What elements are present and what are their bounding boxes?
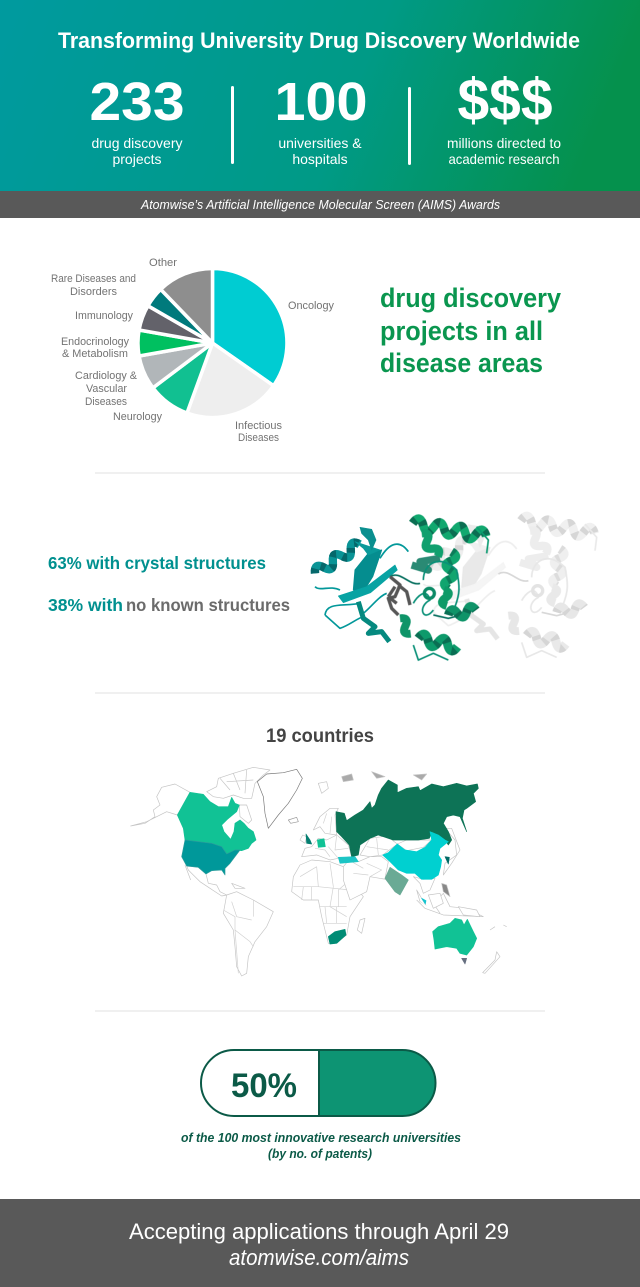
footer xyxy=(0,1199,640,1287)
stat: millions: $$$ xyxy=(458,67,552,133)
China xyxy=(383,832,448,879)
stat: millions: academic research xyxy=(448,151,560,167)
slice: Neurology xyxy=(153,343,212,413)
slice: Cardiology xyxy=(139,343,212,388)
caption xyxy=(181,1131,461,1161)
stat: 233 projects: projects xyxy=(112,151,162,167)
text: crystal structures: 63% with crystal structures xyxy=(48,553,266,573)
pie labels: Other xyxy=(149,257,177,269)
slice: Endocrinology xyxy=(138,330,212,356)
grey protein copy xyxy=(421,515,597,657)
Singapore xyxy=(422,898,426,904)
stat: millions xyxy=(447,67,561,167)
stat: 233 projects: drug discovery xyxy=(91,135,183,151)
stat: 100 universities xyxy=(274,72,368,167)
pill: 50 percent xyxy=(201,1050,436,1116)
map: Europe, Africa and Asia xyxy=(292,772,507,973)
United Kingdom xyxy=(306,834,312,844)
Australia xyxy=(433,918,477,955)
stat: 100 universities: universities & xyxy=(278,135,362,151)
slice: Oncology xyxy=(212,268,287,386)
protein structure illustration xyxy=(312,515,597,660)
pie labels: Neurology xyxy=(113,411,162,423)
pie chart: disease areas xyxy=(138,268,287,417)
pie labels: Disorders xyxy=(70,286,117,298)
ligand molecule xyxy=(388,577,410,615)
Middle East and Central Asia xyxy=(343,857,398,900)
caption: of the 100 most innovative research universities xyxy=(181,1131,461,1145)
slice: Immunology xyxy=(139,306,212,343)
heading: drug discovery projects: projects in all xyxy=(380,316,543,346)
pie labels: Vascular xyxy=(86,383,127,395)
pie labels: Cardiology & xyxy=(75,370,138,382)
title: Transforming University Drug Discovery Worldwide xyxy=(58,28,580,53)
world map xyxy=(131,767,507,976)
slice: Infectious Diseases xyxy=(187,343,274,417)
stat: millions: millions directed to xyxy=(447,135,561,151)
pie labels: Immunology xyxy=(75,310,133,322)
slice: Rare Diseases xyxy=(148,289,212,343)
Canada xyxy=(177,792,256,854)
Southeast Asia and islands xyxy=(413,877,435,907)
pie labels: Oncology xyxy=(288,300,334,312)
stat: 233 projects: 233 xyxy=(90,72,184,132)
text: no known structures xyxy=(48,595,290,615)
caption: (by no. of patents) xyxy=(268,1147,372,1161)
pie labels xyxy=(51,257,334,444)
pie labels: & Metabolism xyxy=(62,348,128,360)
pie labels: Diseases xyxy=(238,432,279,444)
stat: 100 universities: hospitals xyxy=(292,151,348,167)
Russia xyxy=(336,780,478,857)
pill: 50 percent: 50% xyxy=(231,1067,297,1105)
pie labels: Rare Diseases and xyxy=(51,273,136,285)
Germany xyxy=(317,839,325,847)
stat: 233 projects xyxy=(90,72,184,167)
India xyxy=(385,867,408,895)
heading: 19 countries: 19 countries xyxy=(266,726,374,747)
header banner xyxy=(0,0,640,191)
pie labels: Diseases xyxy=(85,396,127,408)
footer: Accepting applications through April 29 xyxy=(129,1219,509,1244)
text: no known structures: 38% with xyxy=(48,595,123,615)
subtitle bar: Atomwise’s Artificial Intelligence Molecular Screen (AIMS) Awards xyxy=(140,197,500,212)
heading: drug discovery projects xyxy=(380,283,561,378)
heading: drug discovery projects: drug discovery xyxy=(380,283,561,313)
pie labels: Infectious xyxy=(235,420,282,432)
Europe and Scandinavia xyxy=(302,835,352,860)
text: no known structures: no known structures xyxy=(126,595,290,615)
Tasmania xyxy=(462,958,467,964)
South Korea xyxy=(445,857,449,864)
coloured protein xyxy=(312,518,488,660)
pie labels: Endocrinology xyxy=(61,336,129,348)
Africa xyxy=(292,860,363,943)
slice: Other xyxy=(161,268,212,343)
map: Americas xyxy=(131,767,302,976)
stat: 100 universities: 100 xyxy=(274,72,368,132)
subtitle bar xyxy=(0,191,640,218)
heading: drug discovery projects: disease areas xyxy=(380,348,543,378)
South Africa xyxy=(328,929,346,944)
Turkey xyxy=(338,857,358,863)
footer: atomwise.com/aims xyxy=(229,1245,409,1270)
USA xyxy=(182,840,240,875)
